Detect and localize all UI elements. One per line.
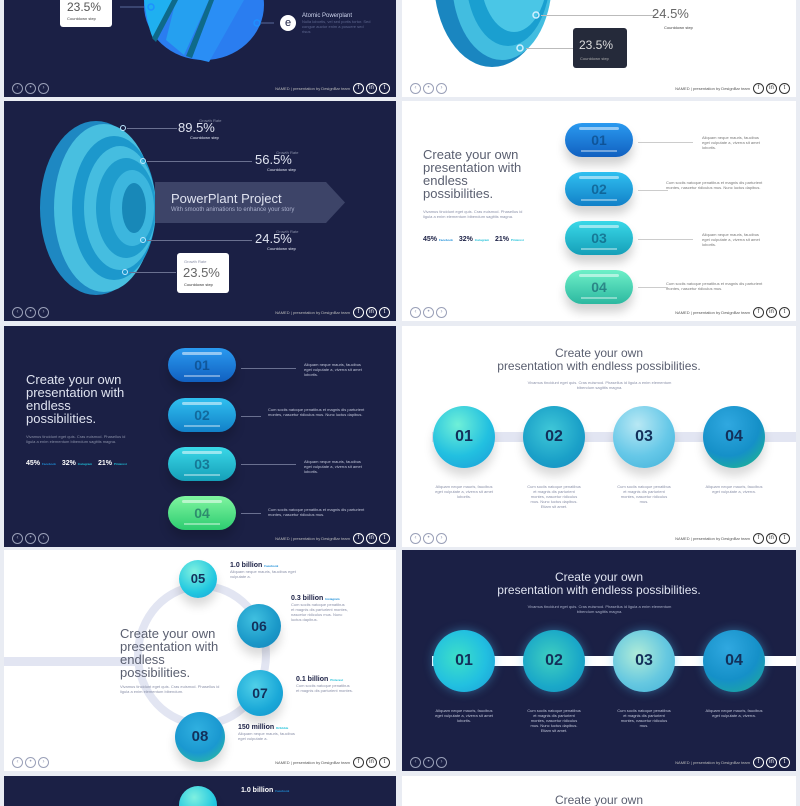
- sphere 04: [703, 406, 765, 468]
- pill 04: 04: [194, 505, 210, 521]
- footer: [12, 533, 390, 544]
- title: presentation with endless possibilities.: [497, 359, 701, 373]
- title: Create your own: [555, 346, 643, 360]
- footer: [410, 757, 790, 768]
- label: 89.5%: 89.5%: [178, 120, 215, 135]
- stat: 0.3 billion: Cum sociis natoque penatibus et magnis dis parturient montes, nascetur ridiculus mus. Nunc luctus dapibus.: [291, 602, 348, 622]
- slide: circular steps dark (cropped): [4, 776, 396, 806]
- footer: [12, 83, 390, 94]
- callout: 23.5% white box: [122, 253, 229, 293]
- pill 01: 01: [194, 357, 210, 373]
- callout: 23.5% white box: Countdown step: [67, 16, 96, 21]
- pill 02: [168, 398, 236, 432]
- sphere 02: [523, 630, 585, 692]
- footer: t: [384, 85, 385, 91]
- sphere 04: 04: [725, 652, 743, 669]
- footer: •: [427, 309, 430, 315]
- footer: •: [29, 85, 32, 91]
- title: Create your own presentation with endless possibilities.: [423, 147, 521, 201]
- stat: 1.0 billion: Aliquam neque mauris, faucibus eget vulputate a.: [230, 569, 296, 579]
- footer: ‹: [16, 759, 18, 765]
- slide: atomic powerplant (top-left, cropped): [4, 0, 396, 97]
- label: 24.5%: Countdown step: [267, 246, 296, 251]
- captions: Cum sociis natoque penatibus et magnis dis parturient montes, nascetur ridiculus mus.: [617, 484, 671, 504]
- captions: Cum sociis natoque penatibus et magnis dis parturient montes, nascetur ridiculus mus. Nunc luctus dapibus. Etiam sit amet.: [527, 708, 581, 733]
- footer: f: [358, 535, 359, 541]
- captions: Cum sociis natoque penatibus et magnis dis parturient montes, nascetur ridiculus mus. Nunc luctus dapibus. Etiam sit amet.: [527, 484, 581, 509]
- subtitle: Vivamus tincidunt eget quis. Cras euismod. Phasellus id ligula a enim elementum bibendum sagittis magna.: [528, 380, 671, 390]
- callout: dark 23.5% box: [573, 28, 627, 68]
- footer: in: [369, 535, 374, 541]
- sphere 02: 02: [545, 652, 563, 669]
- label: 56.5%: Countdown step: [267, 167, 296, 172]
- stat: 1.0 billion: 1.0 billion Facebook: [241, 787, 289, 794]
- sphere 07: 07: [252, 685, 268, 701]
- band: [4, 657, 136, 666]
- sphere 06: 06: [251, 618, 267, 634]
- footer: in: [369, 759, 374, 765]
- text items: Aliquam neque mauris, faucibus eget vulputate a, viverra sit amet lobortis.: [702, 232, 760, 247]
- slide: concentric chart light (top-right, cropped): Countdown step: [664, 25, 693, 30]
- label: 24.5%: [140, 229, 298, 251]
- footer: t: [384, 309, 385, 315]
- footer: f: [758, 309, 759, 315]
- label: 24.5%: 24.5%: [255, 231, 292, 246]
- captions: Aliquam neque mauris, faucibus eget vulputate a, viverra.: [706, 484, 762, 494]
- pill 02: [565, 172, 633, 206]
- text items: Aliquam neque mauris, faucibus eget vulputate a, viverra sit amet lobortis.: [304, 362, 362, 377]
- stats: 45% Facebook 32% Instagram 21% Pinterest: [26, 460, 127, 467]
- text items: [241, 362, 364, 517]
- footer: in: [769, 309, 774, 315]
- title: Create your own presentation with endless possibilities.: [120, 626, 218, 680]
- sphere 03: [613, 406, 675, 468]
- footer: [12, 757, 390, 768]
- sphere 05: [179, 560, 217, 598]
- footer: •: [29, 535, 32, 541]
- pill 02: 02: [194, 407, 210, 423]
- footer: in: [369, 85, 374, 91]
- title: [497, 570, 701, 597]
- stat: 150 million: Aliquam neque mauris, faucibus eget vulputate a.: [238, 731, 295, 741]
- footer: NAMED | presentation by DesignBar team: [275, 760, 350, 765]
- footer: ‹: [414, 535, 416, 541]
- text items: Cum sociis natoque penatibus et magnis dis parturient montes, nascetur ridiculus mus. Nunc luctus dapibus.: [666, 180, 762, 190]
- pill 01: [168, 348, 236, 382]
- sphere 05: 05: [191, 571, 205, 586]
- footer: ‹: [16, 309, 18, 315]
- callout: dark 23.5% box: 23.5%: [579, 38, 613, 52]
- callout: dark 23.5% box: Countdown step: [580, 56, 609, 61]
- label: 89.5%: Growth Rate: [199, 118, 221, 123]
- footer: f: [758, 535, 759, 541]
- subtitle: Vivamus tincidunt eget quis. Cras euismod. Phasellus id ligula a enim elementum bibendum sagittis magna.: [528, 604, 671, 614]
- text block: Vivamus tincidunt eget quis. Cras euismod. Phasellus id ligula a enim elementum bibendum.: [120, 684, 219, 694]
- pill 04: 04: [591, 279, 607, 295]
- stat: 0.1 billion: 0.1 billion Pinterest: [296, 676, 343, 683]
- footer: ‹: [16, 85, 18, 91]
- callout: 23.5% white box: [60, 0, 112, 27]
- label: 24.5%: [541, 15, 656, 16]
- title: presentation with endless possibilities.: [497, 583, 701, 597]
- footer: NAMED | presentation by DesignBar team: [675, 310, 750, 315]
- stat: 150 million: [238, 724, 295, 741]
- footer: in: [769, 759, 774, 765]
- footer: t: [784, 535, 785, 541]
- footer: NAMED | presentation by DesignBar team: [675, 536, 750, 541]
- label: 56.5%: 56.5%: [255, 152, 292, 167]
- footer: ›: [440, 535, 442, 541]
- text items: Cum sociis natoque penatibus et magnis dis parturient montes, nascetur ridiculus mus.: [268, 507, 364, 517]
- footer: ‹: [414, 309, 416, 315]
- icon: e circle: [280, 15, 296, 31]
- footer: f: [758, 759, 759, 765]
- label: 89.5%: Countdown step: [190, 135, 219, 140]
- footer: [12, 307, 390, 318]
- footer: ›: [42, 309, 44, 315]
- slide: pills light: [402, 101, 796, 321]
- text: Atomic Powerplant: [302, 12, 370, 34]
- label: 56.5%: [140, 150, 298, 172]
- text items: [638, 135, 762, 291]
- arrow banner: PowerPlant Project: PowerPlant Project: [171, 191, 282, 206]
- pill 04: [565, 270, 633, 304]
- footer: f: [358, 85, 359, 91]
- slide: spheres timeline light: [402, 326, 796, 547]
- label: 89.5%: [120, 118, 222, 140]
- captions: Aliquam neque mauris, faucibus eget vulputate a, viverra.: [706, 708, 762, 718]
- sphere 03: [613, 630, 675, 692]
- sphere 07: [237, 670, 283, 716]
- captions: Aliquam neque mauris, faucibus eget vulputate a, viverra sit amet lobortis.: [435, 708, 493, 723]
- pill 03: [168, 447, 236, 481]
- footer: ‹: [414, 759, 416, 765]
- label: 56.5%: Growth Rate: [276, 150, 298, 155]
- text items: Cum sociis natoque penatibus et magnis dis parturient montes, nascetur ridiculus mus.: [666, 281, 762, 291]
- captions: Aliquam neque mauris, faucibus eget vulputate a, viverra sit amet lobortis.: [435, 484, 493, 499]
- arrow banner: PowerPlant Project: [155, 182, 345, 223]
- pill 01: 01: [591, 132, 607, 148]
- footer: ›: [440, 309, 442, 315]
- sphere 03: 03: [635, 428, 653, 445]
- footer: t: [384, 759, 385, 765]
- label: 24.5%: Growth Rate: [276, 229, 298, 234]
- stat: 0.3 billion: 0.3 billion Instagram: [291, 595, 340, 602]
- stats: 45% Facebook 32% Instagram 21% Pinterest: [423, 236, 524, 243]
- footer: ‹: [414, 85, 416, 91]
- sphere 02: [523, 406, 585, 468]
- footer: •: [29, 759, 32, 765]
- stat: 1.0 billion: 1.0 billion Facebook: [230, 562, 278, 569]
- slide: concentric chart light (top-right, cropped): [402, 0, 796, 97]
- footer: NAMED | presentation by DesignBar team: [675, 86, 750, 91]
- sphere 08: [175, 712, 225, 762]
- title: Create your own presentation with endless possibilities.: [26, 372, 124, 426]
- chart: concentric rings: [40, 121, 155, 295]
- footer: ›: [440, 85, 442, 91]
- text: Atomic Powerplant: Atomic Powerplant: [302, 13, 352, 19]
- footer: NAMED | presentation by DesignBar team: [675, 760, 750, 765]
- footer: ‹: [16, 535, 18, 541]
- footer: t: [784, 85, 785, 91]
- footer: in: [769, 535, 774, 541]
- sphere 06: [237, 604, 281, 648]
- footer: f: [358, 759, 359, 765]
- callout: 23.5% white box: Countdown step: [184, 282, 213, 287]
- footer: [410, 83, 790, 94]
- arrow banner: PowerPlant Project: With smooth animations to enhance your story: [171, 207, 294, 213]
- footer: f: [758, 85, 759, 91]
- footer: •: [427, 535, 430, 541]
- footer: ›: [42, 759, 44, 765]
- callout: 23.5% white box: 23.5%: [67, 0, 101, 14]
- icon: e circle: e: [285, 17, 291, 29]
- captions: [435, 708, 762, 733]
- text block: Vivamus tincidunt eget quis. Cras euismod. Phasellus id ligula a enim elementum bibendum sagittis magna.: [26, 434, 125, 444]
- callout: 23.5% white box: 23.5%: [183, 265, 220, 280]
- footer: ›: [440, 759, 442, 765]
- slide: circular steps light: [4, 550, 396, 771]
- footer: NAMED | presentation by DesignBar team: [275, 310, 350, 315]
- sphere 01: [433, 630, 495, 692]
- stat: 150 million: 150 million Dribbble: [238, 724, 288, 731]
- pill 03: 03: [194, 456, 210, 472]
- stat: 0.1 billion: Cum sociis natoque penatibus et magnis dis parturient montes.: [296, 683, 353, 693]
- footer: •: [29, 309, 32, 315]
- title: Create your own: [555, 570, 643, 584]
- sphere 01: 01: [455, 652, 473, 669]
- band: [432, 432, 796, 442]
- band: [432, 656, 796, 666]
- footer: NAMED | presentation by DesignBar team: [275, 86, 350, 91]
- sphere 04: 04: [725, 428, 743, 445]
- footer: in: [769, 85, 774, 91]
- pill 02: 02: [591, 181, 607, 197]
- footer: [410, 533, 790, 544]
- callout: 23.5% white box: Growth Rate: [184, 259, 206, 264]
- chart: concentric shape: [436, 0, 550, 67]
- sphere 08: 08: [192, 728, 208, 745]
- text items: Aliquam neque mauris, faucibus eget vulputate a, viverra sit amet lobortis.: [304, 459, 362, 474]
- sphere 04: [703, 630, 765, 692]
- footer: t: [784, 309, 785, 315]
- text items: Aliquam neque mauris, faucibus eget vulputate a, viverra sit amet lobortis.: [702, 135, 760, 150]
- slide: light (cropped): [402, 776, 796, 806]
- footer: ›: [42, 535, 44, 541]
- pill 01: [565, 123, 633, 157]
- footer: •: [427, 85, 430, 91]
- sphere 05: [179, 786, 217, 806]
- pill 04: [168, 496, 236, 530]
- stat: 1.0 billion: [230, 562, 296, 579]
- sphere: blue striped: [120, 0, 274, 62]
- sphere 03: 03: [635, 652, 653, 669]
- footer: f: [358, 309, 359, 315]
- footer: ›: [42, 85, 44, 91]
- footer: t: [784, 759, 785, 765]
- pill 03: [565, 221, 633, 255]
- captions: [435, 484, 762, 509]
- captions: Cum sociis natoque penatibus et magnis dis parturient montes, nascetur ridiculus mus.: [617, 708, 671, 728]
- sphere 02: 02: [545, 428, 563, 445]
- ring: [134, 582, 270, 728]
- footer: NAMED | presentation by DesignBar team: [275, 536, 350, 541]
- text block: Vivamus tincidunt eget quis. Cras euismod. Phasellus id ligula a enim elementum bibendum sagittis magna.: [423, 209, 522, 219]
- title: [497, 346, 701, 373]
- slide: spheres timeline dark: [402, 550, 796, 771]
- footer: t: [384, 535, 385, 541]
- text items: Cum sociis natoque penatibus et magnis dis parturient montes, nascetur ridiculus mus. Nunc luctus dapibus.: [268, 407, 364, 417]
- footer: •: [427, 759, 430, 765]
- slide: PowerPlant Project: [4, 101, 396, 321]
- footer: [410, 307, 790, 318]
- sphere 01: [433, 406, 495, 468]
- slide: pills dark: [4, 326, 396, 547]
- stat: 0.1 billion: [296, 676, 353, 693]
- pill 03: 03: [591, 230, 607, 246]
- sphere 01: 01: [455, 428, 473, 445]
- slide: concentric chart light (top-right, cropped): 24.5%: [652, 6, 689, 21]
- footer: in: [369, 309, 374, 315]
- text: Atomic Powerplant: Nulla lobortis, vel sed portis tortor. Sed congue auctor enim a posuere sed risus: [302, 19, 370, 34]
